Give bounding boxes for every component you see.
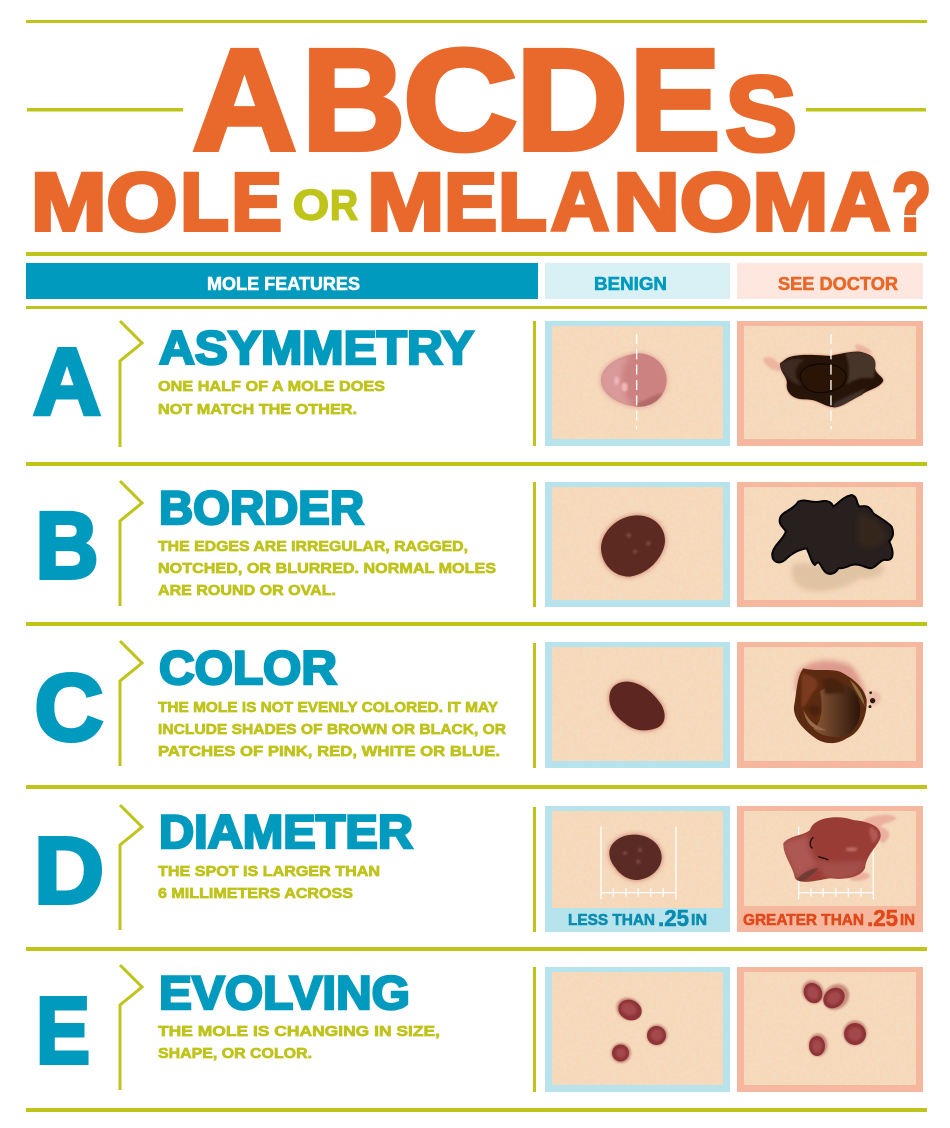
divider A	[533, 321, 536, 446]
subtitle: Mole or Melanoma?: M	[367, 157, 444, 248]
row A: asymmetry	[33, 321, 923, 447]
description B: THE EDGES ARE IRREGULAR, RAGGED,	[158, 538, 468, 555]
chevron D	[120, 805, 142, 930]
title: ABCDEs	[192, 20, 797, 180]
header: see doctor: SEE DOCTOR	[778, 274, 898, 294]
description C: THE MOLE IS NOT EVENLY COLORED. IT MAY	[158, 699, 498, 716]
rule D	[26, 947, 927, 951]
heading: asymmetry: ASYMMETRY	[159, 321, 474, 374]
description D: 6 MILLIMETERS ACROSS	[158, 885, 353, 902]
caption: greater than .25 in: .25	[867, 905, 898, 931]
description A: NOT MATCH THE OTHER.	[158, 401, 357, 418]
image: benign asymmetry	[545, 321, 730, 446]
scale: benign	[601, 827, 676, 899]
table header	[26, 263, 923, 299]
title: ABCDEs: A	[192, 20, 296, 180]
heading: diameter: DIAMETER	[159, 805, 413, 858]
description C	[158, 699, 506, 760]
row E: evolving	[36, 965, 923, 1092]
header: see doctor	[737, 263, 923, 299]
subtitle: Mole or Melanoma?: L	[498, 157, 547, 248]
image: irregular color	[737, 642, 923, 768]
letter D: D	[34, 818, 104, 924]
description D: THE SPOT IS LARGER THAN	[158, 863, 380, 880]
description E: THE MOLE IS CHANGING IN SIZE,	[158, 1023, 440, 1040]
rule B	[26, 622, 927, 626]
subtitle: Mole or Melanoma?: M	[31, 157, 106, 248]
heading: evolving: EVOLVING	[159, 966, 410, 1019]
letter C: C	[34, 655, 104, 761]
chevron E	[120, 965, 142, 1090]
heading: border: BORDER	[159, 481, 364, 534]
description D	[158, 863, 380, 902]
subtitle: Mole or Melanoma?: A	[831, 157, 890, 248]
letter A: A	[33, 329, 101, 435]
letter E: E	[36, 978, 90, 1084]
image: irregular asymmetry	[737, 321, 923, 446]
subtitle: Mole or Melanoma?: E	[232, 157, 282, 248]
header: mole features	[26, 263, 538, 299]
image: irregular diameter	[737, 806, 923, 932]
caption: greater than .25 in	[743, 905, 915, 931]
divider C	[533, 643, 536, 768]
caption: less than .25 in: IN	[691, 912, 707, 929]
rule A	[26, 462, 927, 466]
subtitle: Mole or Melanoma?: O	[293, 182, 329, 230]
title: ABCDEs: S	[725, 54, 797, 174]
divider D	[533, 807, 536, 932]
image: benign border	[545, 482, 730, 607]
row D: diameter	[34, 805, 923, 932]
rule under title	[26, 252, 927, 256]
subtitle: Mole or Melanoma?: ?	[892, 157, 931, 248]
description B	[158, 538, 496, 599]
caption: greater than .25 in: GREATER THAN	[743, 912, 864, 929]
image: changed evolving	[737, 967, 923, 1092]
image: benign diameter	[545, 806, 730, 932]
subtitle: Mole or Melanoma?: M	[752, 157, 828, 248]
description C: INCLUDE SHADES OF BROWN OR BLACK, OR	[158, 721, 506, 738]
header: benign: BENIGN	[594, 274, 667, 294]
description E	[158, 1023, 440, 1062]
bottom rule	[26, 1108, 927, 1112]
divider E	[533, 967, 536, 1092]
description C: PATCHES OF PINK, RED, WHITE OR BLUE.	[158, 743, 500, 760]
description B: NOTCHED, OR BLURRED. NORMAL MOLES	[158, 560, 496, 577]
row C: color	[34, 641, 923, 768]
rule under header	[26, 306, 927, 309]
subtitle: Mole or Melanoma?: O	[106, 157, 178, 248]
title side rule right	[806, 108, 926, 112]
caption: less than .25 in	[568, 905, 707, 931]
title side rule left	[27, 108, 183, 112]
subtitle: Mole or Melanoma?: R	[330, 182, 358, 230]
subtitle: Mole or Melanoma?: E	[444, 157, 497, 248]
chevron B	[120, 481, 142, 606]
header: benign	[545, 263, 730, 299]
subtitle: Mole or Melanoma?: O	[680, 157, 752, 248]
heading: color: COLOR	[159, 641, 337, 694]
rule C	[26, 785, 927, 789]
description A: ONE HALF OF A MOLE DOES	[158, 378, 385, 395]
chevron C	[120, 641, 142, 766]
caption: greater than .25 in: IN	[900, 912, 915, 929]
subtitle: Mole or Melanoma?: L	[180, 157, 229, 248]
top rule	[26, 20, 927, 23]
title: ABCDEs: D	[516, 20, 628, 180]
divider B	[533, 482, 536, 607]
caption: less than .25 in: .25	[658, 905, 689, 931]
row B: border	[36, 481, 923, 607]
letter B: B	[36, 493, 98, 599]
title: ABCDEs: C	[403, 20, 518, 180]
header: mole features: MOLE FEATURES	[207, 274, 360, 294]
description B: ARE ROUND OR OVAL.	[158, 582, 336, 599]
image: benign evolving	[545, 967, 730, 1092]
subtitle: Mole or Melanoma?: N	[614, 157, 680, 248]
description A	[158, 378, 385, 418]
scale: irregular	[799, 827, 873, 899]
title: ABCDEs: E	[630, 20, 720, 180]
image: benign color	[545, 642, 730, 768]
caption: less than .25 in: LESS THAN	[568, 912, 655, 929]
title: ABCDEs: B	[302, 20, 405, 180]
description E: SHAPE, OR COLOR.	[158, 1045, 312, 1062]
image: irregular border	[737, 482, 923, 607]
subtitle: Mole or Melanoma?: A	[551, 157, 609, 248]
subtitle: Mole or Melanoma?	[31, 157, 931, 248]
chevron A	[120, 321, 142, 447]
